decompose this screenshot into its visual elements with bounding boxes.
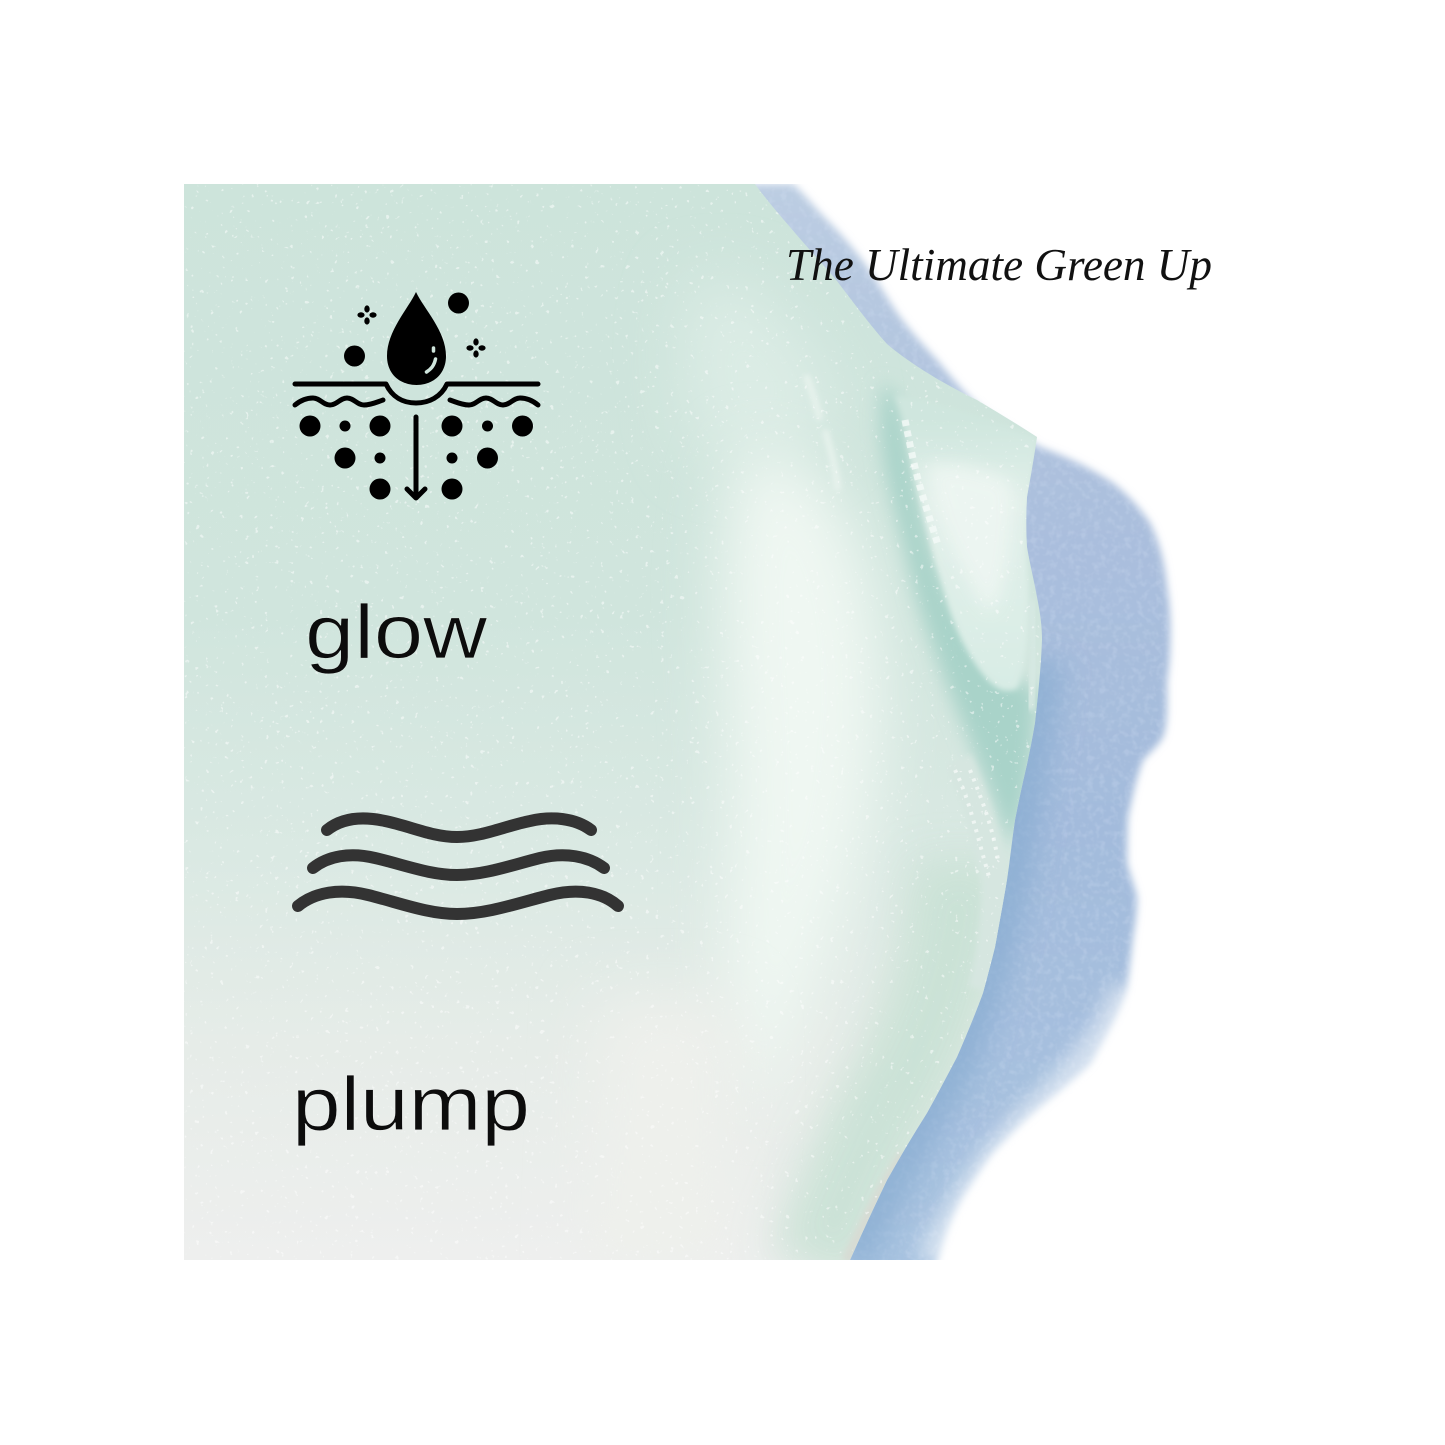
skin wave right <box>450 398 538 405</box>
droplet shine <box>426 348 436 372</box>
heading: The Ultimate Green Up <box>786 239 1212 290</box>
sparkle left <box>357 305 377 325</box>
left dot <box>344 346 365 366</box>
label: plump: plump <box>292 1062 530 1147</box>
cream speckle <box>184 184 1064 1260</box>
skin wave left <box>295 398 383 405</box>
wave 3 <box>298 892 618 914</box>
wave 2 <box>313 855 604 875</box>
background panel: cream swatch <box>184 184 1180 1290</box>
crest sparkle <box>905 420 938 545</box>
fold valley shadow <box>881 385 1036 850</box>
frothy edge band <box>958 760 995 990</box>
lower right green tint <box>815 860 960 1270</box>
cream base gradient <box>184 184 1084 1260</box>
arrow <box>407 417 425 498</box>
frothy texture <box>955 770 998 880</box>
white highlight band <box>722 449 882 1110</box>
upper soft light <box>694 297 812 438</box>
icon: waves <box>298 818 618 914</box>
top streak highlights <box>806 375 838 490</box>
icon: droplet absorbing into skin <box>295 292 538 500</box>
fold lobe <box>895 395 1037 691</box>
lower left pale tint <box>651 1022 678 1068</box>
skin particles <box>300 416 533 500</box>
blue grain texture <box>906 462 1163 1257</box>
sparkle right <box>466 338 486 358</box>
skin surface line <box>295 384 538 403</box>
blue inner shade <box>850 660 1042 1262</box>
blue shadow shape <box>745 184 1170 1290</box>
surrounding dots <box>448 292 469 314</box>
blue outer fade <box>930 987 1127 1262</box>
wave 1 <box>327 818 591 837</box>
right rim <box>1028 678 1036 712</box>
cream body <box>184 184 1084 1270</box>
droplet <box>387 292 446 385</box>
cream edge warm rim <box>848 1155 905 1262</box>
lobe brighter centre <box>928 463 1008 604</box>
label: glow: glow <box>305 590 488 675</box>
